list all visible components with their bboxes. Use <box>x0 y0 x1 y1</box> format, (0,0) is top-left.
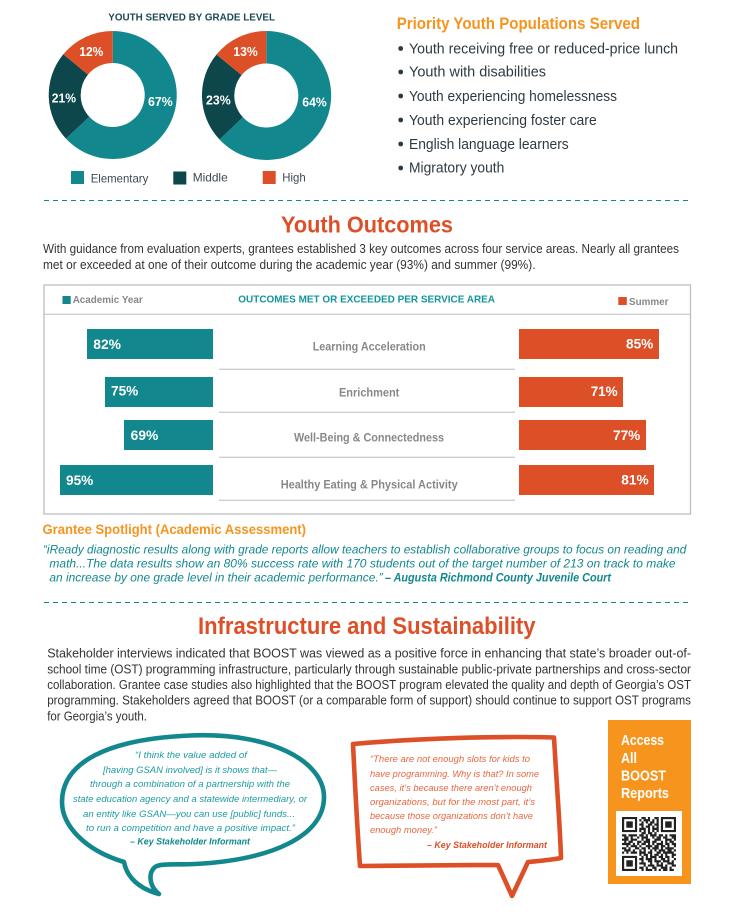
donut chart: first grade split <box>49 31 177 159</box>
bullet list: Youth experiencing foster care <box>409 113 597 129</box>
text block: spotlight quote: “iReady diagnostic results along with grade reports allow teachers to establish collaborative groups to focus on reading and <box>43 542 687 556</box>
callout: orange speech bubble: cases, it’s because there aren’t enough <box>370 783 532 794</box>
academic year bars: 69% <box>131 428 158 443</box>
service area labels <box>281 340 458 491</box>
callout: teal speech bubble: [having GSAN involved] is it shows that— <box>102 765 277 776</box>
donut chart: first grade split: 21% <box>52 92 76 106</box>
text block: outcomes intro: met or exceeded at one of their outcome during the academic year (93%) and summer (99%). <box>43 258 536 272</box>
callout: orange speech bubble: because those organizations don’t have <box>370 811 533 822</box>
text block: infrastructure paragraph: programming. Stakeholders agreed that BOOST (or a comparable form of support) should continue to support OST programs <box>47 693 691 707</box>
bullet list <box>398 41 678 177</box>
service area labels: Healthy Eating & Physical Activity <box>281 477 458 491</box>
legend: Middle <box>193 171 228 185</box>
donut chart: second grade split: 23% <box>206 93 231 107</box>
text block: spotlight quote <box>43 542 687 585</box>
bullet list: Youth receiving free or reduced-price lunch <box>409 41 678 57</box>
heading: grantee spotlight: Grantee Spotlight (Academic Assessment) <box>42 521 306 537</box>
call to action text: All <box>621 751 637 767</box>
text block: spotlight quote: an increase by one grade level in their academic performance.” <box>49 571 384 585</box>
academic year bars: 95% <box>66 473 93 488</box>
call to action text: BOOST <box>621 768 666 784</box>
callout: teal speech bubble: an entity like GSAN—you can use [public] funds... <box>83 809 295 820</box>
callout: teal speech bubble: state education agency and a statewide intermediary, or <box>73 794 308 805</box>
academic year bars: 82% <box>93 337 121 352</box>
panel: youth served by grade level <box>49 12 331 186</box>
donut chart: second grade split: 13% <box>233 45 258 59</box>
legend: summer: Summer <box>629 297 669 308</box>
donut chart: second grade split: 64% <box>302 96 327 110</box>
service area labels: Well-Being & Connectedness <box>294 431 444 445</box>
text block: outcomes intro: With guidance from evaluation experts, grantees established 3 key outcomes across four service areas. Nearly all grantees <box>43 242 679 256</box>
summer bars <box>519 329 659 495</box>
donut chart: second grade split <box>202 31 331 160</box>
bullet list: Migratory youth <box>409 161 504 177</box>
bullet list: Youth experiencing homelessness <box>409 89 617 105</box>
call to action text: Reports <box>621 786 669 802</box>
bullet list: Youth with disabilities <box>409 65 546 81</box>
chart title: YOUTH SERVED BY GRADE LEVEL <box>108 12 276 24</box>
heading: priority populations: Priority Youth Populations Served <box>397 14 640 33</box>
service area labels: Learning Acceleration <box>313 340 426 354</box>
text block: spotlight quote: – Augusta Richmond County Juvenile Court <box>385 571 612 585</box>
text block: outcomes intro <box>43 242 679 272</box>
summer bars: 81% <box>621 472 649 487</box>
text block: infrastructure paragraph: for Georgia’s youth. <box>47 709 147 723</box>
legend: academic year: Academic Year <box>73 295 143 306</box>
bullet list: English language learners <box>409 137 569 153</box>
chart heading: OUTCOMES MET OR EXCEEDED PER SERVICE AREA <box>238 294 495 306</box>
callout: teal speech bubble: through a combination of a partnership with the <box>90 779 290 790</box>
panel: access reports QR box <box>608 720 691 884</box>
text block: infrastructure paragraph: collaboration. Grantee case studies also highlighted that the BOOST program elevated the quality and depth of Georgia’s OST <box>47 678 691 692</box>
callout: orange speech bubble: enough money.” <box>370 825 438 836</box>
call to action text: Access <box>621 733 664 749</box>
callout: orange speech bubble <box>353 737 561 896</box>
legend: High <box>282 171 306 185</box>
academic year bars <box>60 329 213 495</box>
callout: teal speech bubble <box>62 735 324 894</box>
callout: orange speech bubble: have programming. Why is that? In some <box>370 769 539 780</box>
callout: orange speech bubble: – Key Stakeholder Informant <box>427 840 548 851</box>
donut chart: first grade split: 12% <box>79 45 103 59</box>
heading: infrastructure and sustainability: Infrastructure and Sustainability <box>198 613 536 640</box>
summer bars: 77% <box>613 428 640 443</box>
legend <box>71 171 306 186</box>
icon: QR code <box>616 811 682 876</box>
text block: infrastructure paragraph <box>47 647 691 723</box>
legend: Elementary <box>91 172 148 186</box>
callout: teal speech bubble: “I think the value added of <box>135 750 248 761</box>
callout: teal speech bubble: to run a competition and have a positive impact.” <box>86 823 296 834</box>
text block: infrastructure paragraph: Stakeholder interviews indicated that BOOST was viewed as a positive force in enhancing that state’s broader out-of- <box>47 647 691 661</box>
panel: priority youth populations <box>397 14 678 177</box>
callout: orange speech bubble: organizations, but for the most part, it’s <box>370 797 535 808</box>
panel: outcomes bar chart <box>44 285 690 514</box>
summer bars: 85% <box>626 336 653 351</box>
service area labels: Enrichment <box>339 386 399 400</box>
summer bars: 71% <box>591 384 618 399</box>
text block: infrastructure paragraph: school time (OST) programming infrastructure, particularly through sustainable public-private partnerships and cross-sector <box>47 662 691 676</box>
call to action text <box>621 733 669 802</box>
donut chart: first grade split: 67% <box>148 95 173 109</box>
callout: teal speech bubble: – Key Stakeholder Informant <box>130 836 251 848</box>
heading: youth outcomes: Youth Outcomes <box>281 212 453 238</box>
text block: spotlight quote: math...The data results show an 80% success rate with 170 students out of the target number of 213 on track to make <box>49 556 676 570</box>
callout: orange speech bubble: “There are not enough slots for kids to <box>370 754 531 765</box>
academic year bars: 75% <box>111 384 138 399</box>
